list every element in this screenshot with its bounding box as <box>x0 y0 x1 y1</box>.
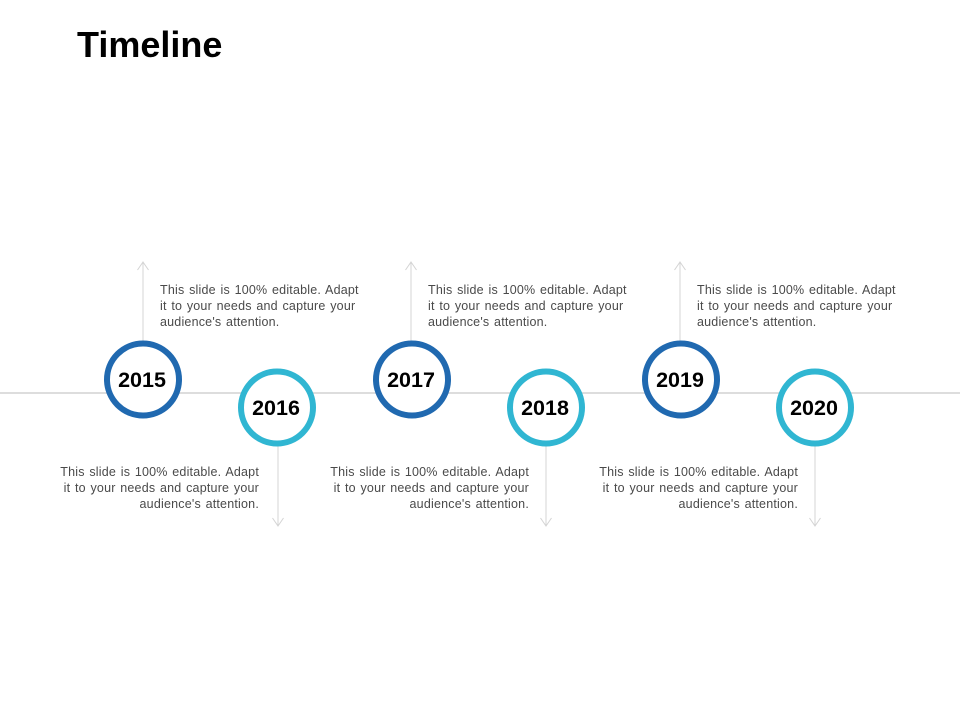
milestone 2017 <box>376 344 448 416</box>
text block: 2019: This slide is 100% editable. Adapt <box>697 283 896 297</box>
text block: 2016: This slide is 100% editable. Adapt <box>60 465 259 479</box>
text block: 2020: it to your needs and capture your <box>603 481 798 495</box>
milestone 2019 <box>645 344 717 416</box>
text block: 2017: it to your needs and capture your <box>428 299 623 313</box>
arrow: 2018 down <box>540 446 552 526</box>
text block: 2017: This slide is 100% editable. Adapt <box>428 283 627 297</box>
text block: 2017: audience's attention. <box>428 315 547 329</box>
text block: 2020 <box>599 465 798 511</box>
text block: 2019: it to your needs and capture your <box>697 299 892 313</box>
text block: 2015: audience's attention. <box>160 315 279 329</box>
text block: 2015: This slide is 100% editable. Adapt <box>160 283 359 297</box>
text block: 2016: it to your needs and capture your <box>64 481 259 495</box>
text block: 2016: audience's attention. <box>140 497 259 511</box>
milestone 2019: 2019 <box>656 368 704 392</box>
text block: 2018: it to your needs and capture your <box>334 481 529 495</box>
milestone 2015 <box>107 344 179 416</box>
text block: 2020: This slide is 100% editable. Adapt <box>599 465 798 479</box>
title: Timeline <box>77 24 222 65</box>
milestone 2020 <box>779 372 851 444</box>
arrow: 2020 down <box>810 446 820 526</box>
arrow: 2015 up <box>138 262 148 341</box>
arrow: 2019 up <box>674 262 686 341</box>
milestone 2016 <box>241 372 313 444</box>
text block: 2020: audience's attention. <box>679 497 798 511</box>
text block: 2019 <box>697 283 896 329</box>
arrow: 2017 up <box>406 262 416 341</box>
milestone 2016: 2016 <box>252 396 300 420</box>
text block: 2016 <box>60 465 259 511</box>
milestone 2015: 2015 <box>118 368 166 392</box>
text block: 2015: it to your needs and capture your <box>160 299 355 313</box>
text block: 2017 <box>428 283 627 329</box>
horizontal timeline axis <box>0 392 960 394</box>
text block: 2018: audience's attention. <box>410 497 529 511</box>
arrow: 2016 down <box>272 446 284 526</box>
text block: 2019: audience's attention. <box>697 315 816 329</box>
milestone 2018 <box>510 372 582 444</box>
text block: 2018 <box>330 465 529 511</box>
text block: 2018: This slide is 100% editable. Adapt <box>330 465 529 479</box>
milestone 2018: 2018 <box>521 396 569 420</box>
milestone 2020: 2020 <box>790 396 838 420</box>
text block: 2015 <box>160 283 359 329</box>
milestone 2017: 2017 <box>387 368 435 392</box>
